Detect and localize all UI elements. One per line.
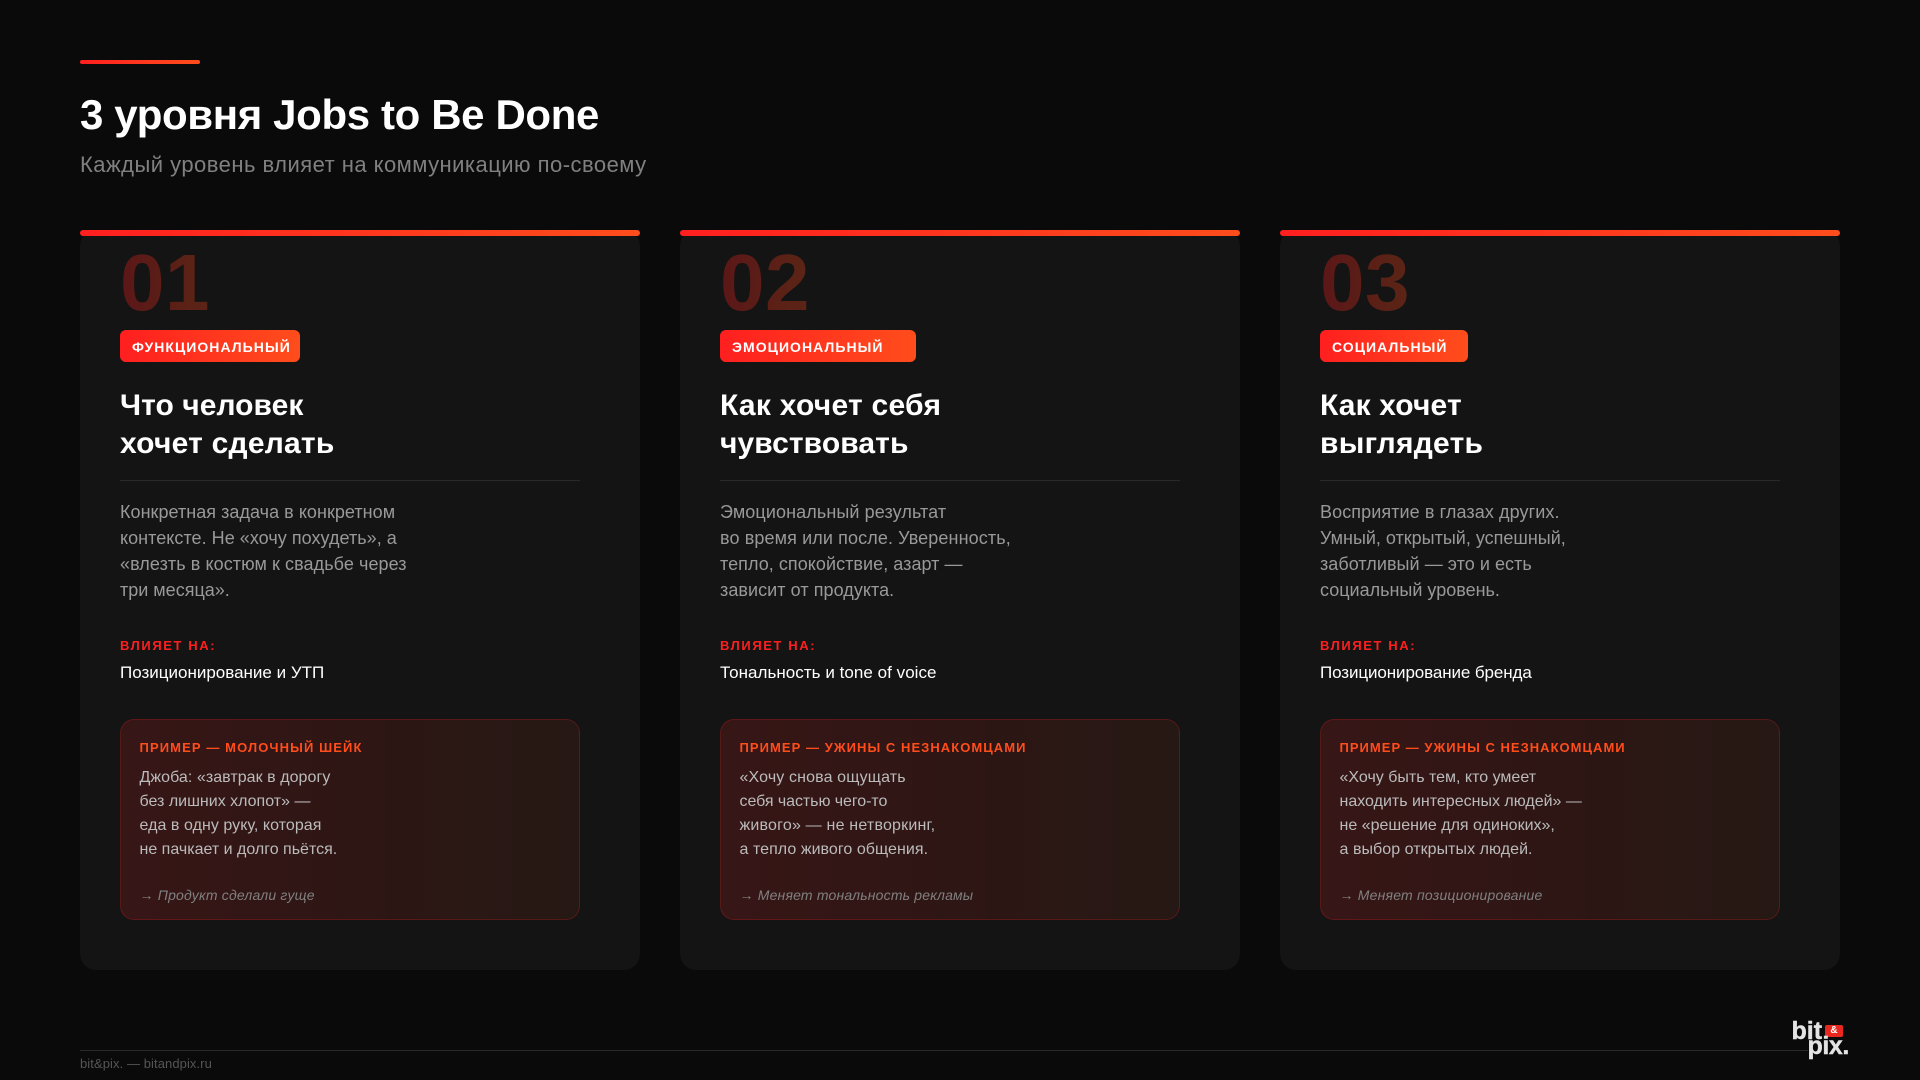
- tag: functional: [120, 330, 300, 362]
- example label: ПРИМЕР — УЖИНЫ С НЕЗНАКОМЦАМИ: [1340, 740, 1626, 755]
- influence label: ВЛИЯЕТ НА:: [720, 638, 816, 653]
- description: Эмоциональный результат: [720, 502, 946, 522]
- description: тепло, спокойствие, азарт —: [720, 554, 963, 574]
- influence label: ВЛИЯЕТ НА:: [120, 638, 216, 653]
- influence label: ВЛИЯЕТ НА:: [1320, 638, 1416, 653]
- card top bar: [680, 230, 1240, 236]
- number 03: 03: [1320, 238, 1410, 327]
- logo badge: &: [1830, 1025, 1838, 1036]
- card heading: Как хочет себя: [720, 389, 941, 422]
- description: заботливый — это и есть: [1320, 554, 1532, 574]
- number 02: 02: [720, 238, 810, 327]
- example text: Джоба: «завтрак в дорогу: [140, 769, 330, 786]
- example text: находить интересных людей» —: [1340, 793, 1582, 810]
- panel: card 03 social: [1280, 230, 1840, 970]
- description: зависит от продукта.: [720, 580, 894, 600]
- card top bar: [1280, 230, 1840, 236]
- number 01: 01: [120, 238, 210, 327]
- subtitle: Каждый уровень влияет на коммуникацию по-своему: [80, 152, 647, 177]
- card heading: чувствовать: [720, 427, 909, 460]
- tag: social: СОЦИАЛЬНЫЙ: [1332, 339, 1448, 355]
- panel: card 01 functional: [80, 230, 640, 970]
- logo: [1792, 1017, 1849, 1060]
- example box: [120, 719, 580, 920]
- example text: «Хочу снова ощущать: [740, 769, 906, 786]
- example text: [1340, 769, 1582, 858]
- tag: emotional: [720, 330, 916, 362]
- panel: card 02 emotional: [680, 230, 1240, 970]
- logo badge: [1825, 1025, 1843, 1037]
- description: социальный уровень.: [1320, 580, 1500, 600]
- example text: себя частью чего-то: [740, 793, 887, 810]
- card heading: [120, 389, 335, 460]
- description: [720, 502, 1011, 600]
- example label: ПРИМЕР — УЖИНЫ С НЕЗНАКОМЦАМИ: [740, 740, 1027, 755]
- tag: emotional: ЭМОЦИОНАЛЬНЫЙ: [732, 339, 884, 355]
- example result: → Меняет позиционирование: [1340, 887, 1543, 903]
- example text: без лишних хлопот» —: [140, 793, 310, 810]
- description: Конкретная задача в конкретном: [120, 502, 395, 522]
- example text: не «решение для одиноких»,: [1340, 817, 1555, 834]
- card heading: Как хочет: [1320, 389, 1462, 422]
- description: Восприятие в глазах других.: [1320, 502, 1560, 522]
- card heading: выглядеть: [1320, 427, 1483, 460]
- example box: [1320, 719, 1780, 920]
- influence value: Позиционирование и УТП: [120, 663, 324, 682]
- description: три месяца».: [120, 580, 230, 600]
- card heading: хочет сделать: [120, 427, 335, 460]
- card heading: Что человек: [120, 389, 303, 422]
- tag: functional: ФУНКЦИОНАЛЬНЫЙ: [132, 339, 291, 355]
- title: 3 уровня Jobs to Be Done: [80, 91, 599, 138]
- accent bar: [80, 60, 200, 64]
- footer text: bit&pix. — bitandpix.ru: [80, 1056, 212, 1071]
- description: Умный, открытый, успешный,: [1320, 528, 1566, 548]
- description: контексте. Не «хочу похудеть», а: [120, 528, 397, 548]
- example text: еда в одну руку, которая: [140, 817, 321, 834]
- description: «влезть в костюм к свадьбе через: [120, 554, 407, 574]
- example text: живого» — не нетворкинг,: [740, 817, 935, 834]
- card heading: [1320, 389, 1483, 460]
- logo word bit: bit: [1792, 1017, 1822, 1045]
- example text: а выбор открытых людей.: [1340, 841, 1533, 858]
- example label: ПРИМЕР — МОЛОЧНЫЙ ШЕЙК: [140, 740, 363, 755]
- example text: «Хочу быть тем, кто умеет: [1340, 769, 1536, 786]
- example text: [140, 769, 337, 858]
- example result: → Меняет тональность рекламы: [740, 887, 973, 903]
- logo word pix: pix.: [1808, 1032, 1849, 1060]
- example text: а тепло живого общения.: [740, 841, 928, 858]
- card top bar: [80, 230, 640, 236]
- tag: social: [1320, 330, 1468, 362]
- example box: [720, 719, 1180, 920]
- example text: [740, 769, 935, 858]
- description: [1320, 502, 1566, 600]
- card heading: [720, 389, 941, 460]
- influence value: Позиционирование бренда: [1320, 663, 1532, 682]
- example result: → Продукт сделали гуще: [140, 887, 315, 903]
- description: во время или после. Уверенность,: [720, 528, 1011, 548]
- example text: не пачкает и долго пьётся.: [140, 841, 337, 858]
- influence value: Тональность и tone of voice: [720, 663, 937, 682]
- description: [120, 502, 407, 600]
